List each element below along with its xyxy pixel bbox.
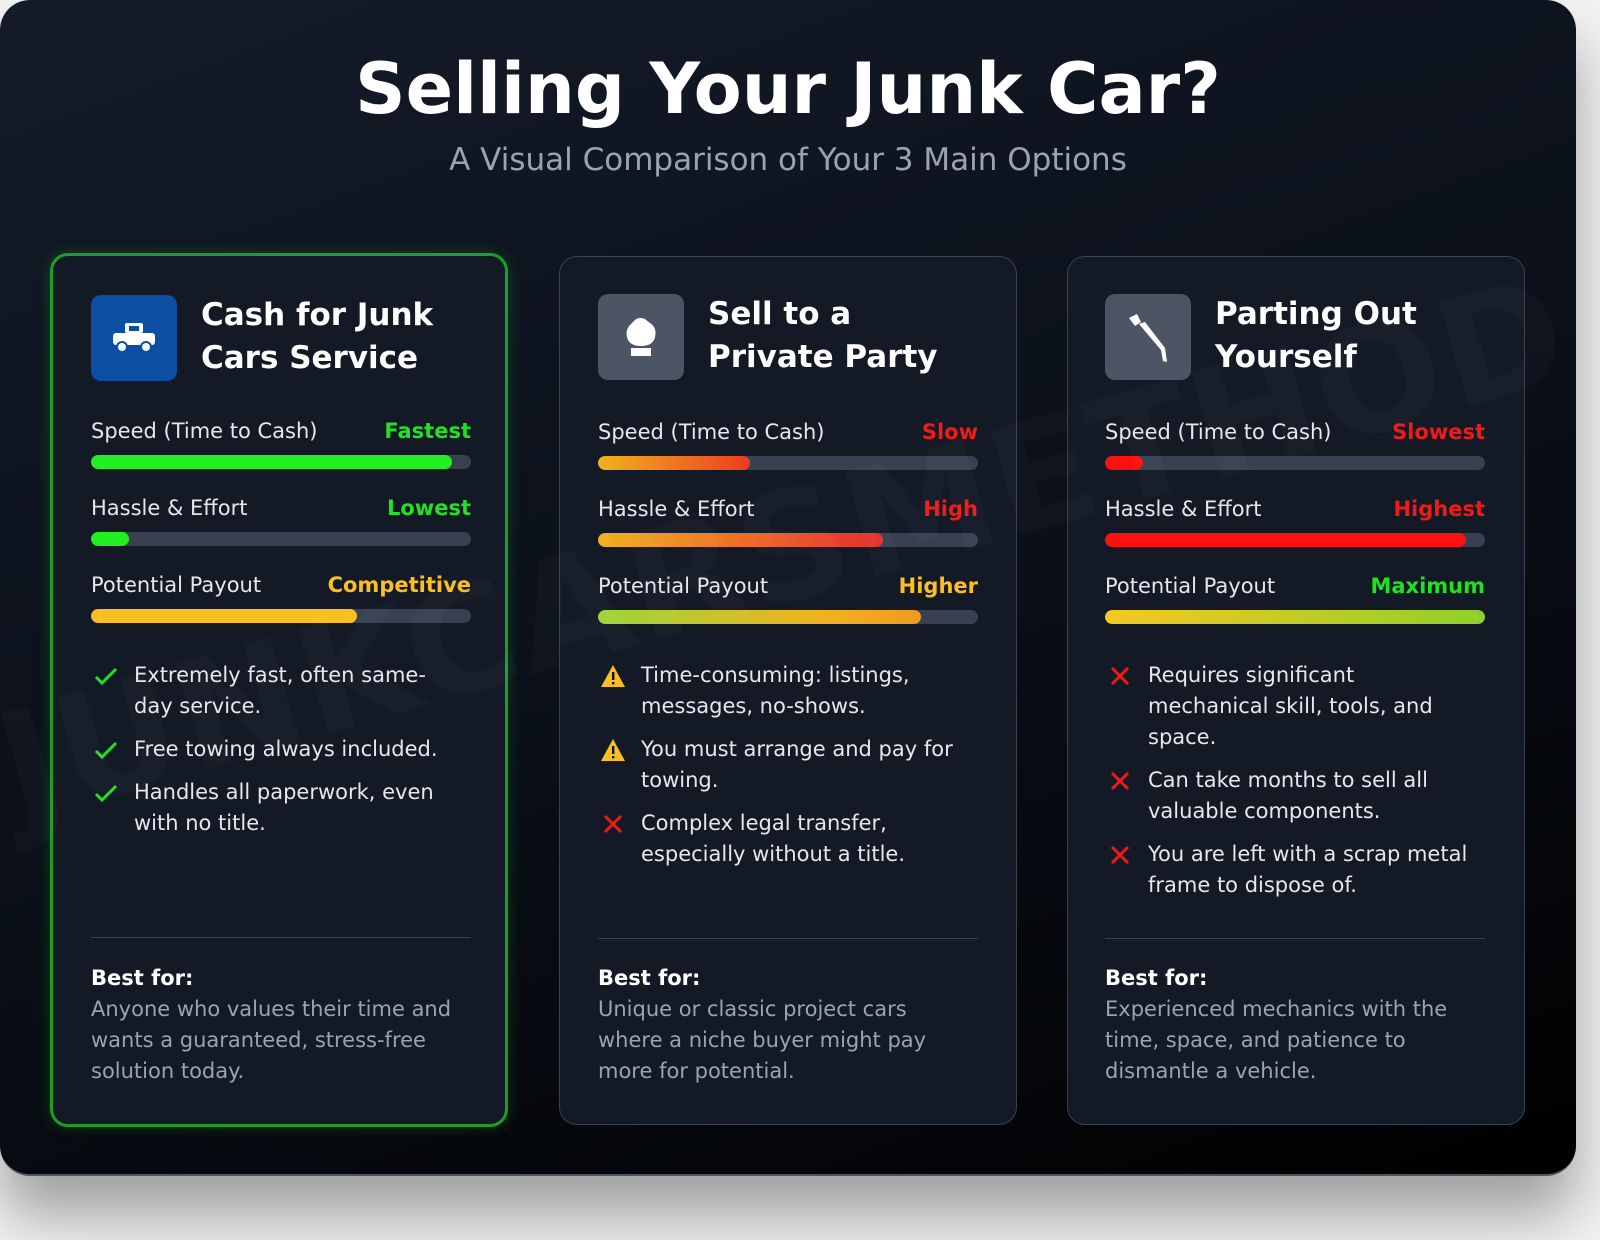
cons list: Complex legal transfer, especially without a title. <box>641 811 905 866</box>
cons list: Can take months to sell all valuable components. <box>1148 768 1428 823</box>
metric: payout <box>598 574 978 624</box>
metric: hassle: Highest <box>1393 497 1485 521</box>
best for: Anyone who values their time and wants a guaranteed, stress-free solution today. <box>91 997 451 1083</box>
icon: wrench <box>1105 294 1191 380</box>
heading <box>708 296 938 375</box>
panel: cash for junk cars <box>50 253 508 1127</box>
metric: payout: Higher <box>899 574 978 598</box>
metric: payout <box>91 573 471 623</box>
cons list: Time-consuming: listings, messages, no-shows. <box>641 663 910 718</box>
panel: private party <box>559 256 1017 1125</box>
panel: parting out <box>1067 256 1525 1125</box>
metric: speed: Fastest <box>384 419 471 443</box>
cons list: mechanical skill, tools, and space. <box>1148 694 1433 749</box>
heading: Sell to a <box>708 296 851 332</box>
heading: Private Party <box>708 339 938 375</box>
metric: payout: Maximum <box>1370 574 1485 598</box>
heading: Yourself <box>1215 339 1357 375</box>
metric: speed <box>598 420 978 470</box>
best for: Best for: <box>1105 966 1207 990</box>
best for: Best for: <box>598 966 700 990</box>
best for: Best for: <box>91 966 193 990</box>
metric: speed: Speed (Time to Cash) <box>1105 420 1332 444</box>
pros list <box>95 663 438 835</box>
metric: speed: Speed (Time to Cash) <box>91 419 318 443</box>
metric: speed <box>91 419 471 469</box>
heading: Parting Out <box>1215 296 1417 332</box>
title: Selling Your Junk Car? <box>355 48 1221 130</box>
metric: speed: Slow <box>922 420 978 444</box>
metric: hassle <box>1105 497 1485 547</box>
metric: hassle: Lowest <box>387 496 471 520</box>
metric: payout <box>1105 574 1485 624</box>
heading <box>1214 296 1417 375</box>
pros list: Handles all paperwork, even with no title. <box>134 780 434 835</box>
cons list <box>601 663 953 866</box>
icon: tow truck <box>91 295 177 381</box>
metric: speed: Slowest <box>1392 420 1485 444</box>
metric: hassle: Hassle & Effort <box>91 496 247 520</box>
metric: payout: Potential Payout <box>598 574 768 598</box>
metric: speed <box>1105 420 1485 470</box>
heading: Cash for Junk <box>201 297 433 333</box>
metric: hassle: Hassle & Effort <box>598 497 754 521</box>
icon: handshake <box>598 294 684 380</box>
subtitle: A Visual Comparison of Your 3 Main Options <box>449 142 1127 178</box>
watermark: JUNKCARSMETHOD <box>0 243 1576 857</box>
heading: Cars Service <box>201 340 418 376</box>
metric: payout: Potential Payout <box>91 573 261 597</box>
metric: hassle: High <box>923 497 978 521</box>
heading <box>201 297 434 376</box>
cons list: You are left with a scrap metal frame to dispose of. <box>1148 842 1467 897</box>
pros list: Free towing always included. <box>134 737 438 761</box>
cons list <box>1111 663 1467 897</box>
best for: Experienced mechanics with the time, space, and patience to dismantle a vehicle. <box>1105 997 1447 1083</box>
cons list: Requires significant <box>1148 663 1354 687</box>
best for: Unique or classic project cars where a niche buyer might pay more for potential. <box>598 997 926 1083</box>
cons list: You must arrange and pay for towing. <box>641 737 953 792</box>
metric: hassle: Hassle & Effort <box>1105 497 1261 521</box>
metric: speed: Speed (Time to Cash) <box>598 420 824 444</box>
metric: payout: Potential Payout <box>1105 574 1275 598</box>
metric: hassle <box>598 497 978 547</box>
metric: payout: Competitive <box>328 573 471 597</box>
pros list: Extremely fast, often same-day service. <box>134 663 426 718</box>
metric: hassle <box>91 496 471 546</box>
